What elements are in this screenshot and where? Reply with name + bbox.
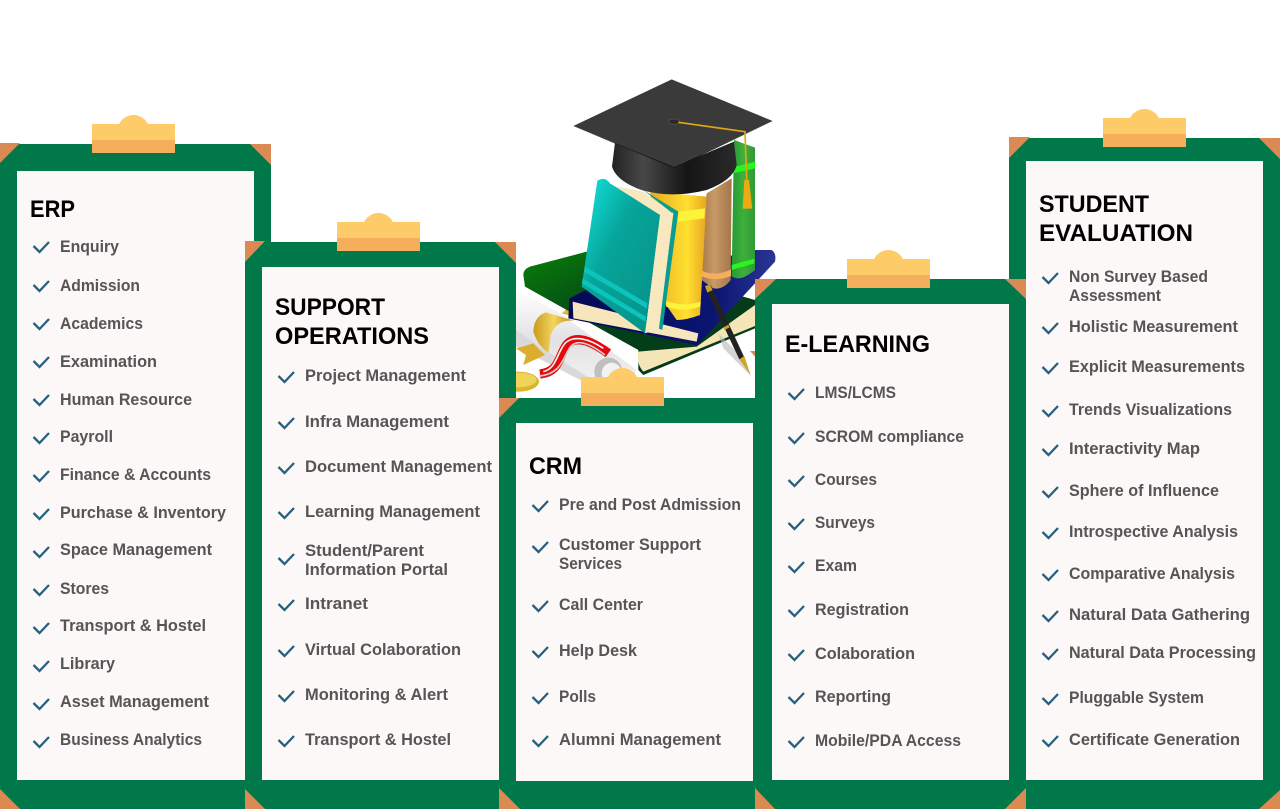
clipboard board bbox=[499, 398, 755, 809]
item: Finance & Accounts: Finance & Accounts bbox=[60, 466, 211, 484]
heading: SUPPORT bbox=[275, 294, 385, 321]
item: Certificate Generation: Certificate Generation bbox=[1069, 731, 1240, 749]
item: Enquiry bbox=[34, 238, 120, 256]
item: Holistic Measurement: Holistic Measurement bbox=[1069, 318, 1238, 336]
small corner fragment bbox=[750, 351, 755, 357]
item: Pre and Post Admission: Pre and Post Admission bbox=[559, 496, 741, 514]
item: Virtual Colaboration: Virtual Colaboration bbox=[305, 641, 461, 659]
item: Alumni Management: Alumni Management bbox=[559, 731, 721, 749]
navy book bbox=[568, 250, 775, 345]
heading bbox=[275, 294, 429, 350]
clip bbox=[1103, 109, 1186, 147]
item: Non Survey Based Assessment: Non Survey Based bbox=[1069, 268, 1208, 286]
panel: Student Evaluation bbox=[1009, 109, 1280, 809]
item: Non Survey Based Assessment bbox=[1042, 268, 1208, 305]
illustration: graduation cap on books bbox=[498, 79, 775, 392]
item: Customer Support Services: Services bbox=[559, 555, 622, 573]
heading bbox=[1039, 191, 1193, 247]
content sheet bbox=[1026, 161, 1263, 780]
corner accents bbox=[755, 279, 1026, 809]
large green book bbox=[523, 252, 755, 375]
item: Natural Data Gathering: Natural Data Gathering bbox=[1069, 606, 1250, 624]
item: Transport & Hostel: Transport & Hostel bbox=[60, 617, 206, 635]
item: Exam: Exam bbox=[815, 557, 857, 575]
item: Human Resource: Human Resource bbox=[60, 391, 192, 409]
item: Library bbox=[34, 655, 116, 673]
item: Infra Management: Infra Management bbox=[305, 413, 450, 431]
item: Student/Parent Information Portal bbox=[278, 542, 448, 579]
item: Intranet: Intranet bbox=[305, 595, 369, 613]
item: Monitoring & Alert: Monitoring & Alert bbox=[305, 686, 448, 704]
content sheet bbox=[772, 304, 1009, 780]
panel: ERP bbox=[0, 115, 271, 809]
heading: CRM bbox=[529, 453, 582, 480]
item: Academics: Academics bbox=[60, 315, 143, 333]
item: Admission: Admission bbox=[60, 277, 140, 295]
item: Sphere of Influence: Sphere of Influence bbox=[1069, 482, 1219, 500]
item: Stores bbox=[34, 580, 109, 598]
item: Trends Visualizations: Trends Visualizations bbox=[1069, 401, 1232, 419]
clip bbox=[847, 250, 930, 288]
heading: ERP bbox=[30, 196, 75, 223]
item: Student/Parent Information Portal: Student/Parent bbox=[305, 542, 424, 560]
item: Intranet bbox=[278, 595, 369, 613]
clip bbox=[337, 213, 420, 251]
corner accents bbox=[0, 143, 271, 809]
clip bbox=[92, 115, 175, 153]
panel: E-Learning bbox=[755, 250, 1026, 809]
mortarboard cap bbox=[573, 79, 773, 209]
upright brown book bbox=[697, 178, 732, 289]
item: Colaboration: Colaboration bbox=[815, 645, 915, 663]
upright green book bbox=[732, 138, 755, 278]
item: Courses: Courses bbox=[815, 471, 877, 489]
item: Asset Management: Asset Management bbox=[60, 693, 209, 711]
item: Polls: Polls bbox=[559, 688, 596, 706]
item: Enquiry: Enquiry bbox=[60, 238, 120, 256]
item: Surveys bbox=[788, 514, 875, 532]
item: Document Management: Document Management bbox=[305, 458, 493, 476]
item: Registration: Registration bbox=[815, 601, 909, 619]
item: Reporting: Reporting bbox=[815, 688, 891, 706]
content sheet bbox=[262, 267, 499, 780]
item: Call Center: Call Center bbox=[559, 596, 644, 614]
item: Customer Support Services bbox=[532, 536, 701, 573]
upright yellow book bbox=[650, 192, 707, 320]
heading: EVALUATION bbox=[1039, 220, 1193, 247]
item: Payroll bbox=[34, 428, 113, 446]
item: Non Survey Based Assessment: Assessment bbox=[1069, 287, 1161, 305]
content sheet bbox=[516, 423, 753, 781]
item: Pluggable System: Pluggable System bbox=[1069, 689, 1204, 707]
item: Comparative Analysis: Comparative Analysis bbox=[1069, 565, 1235, 583]
item: Student/Parent Information Portal: Information Portal bbox=[305, 561, 448, 579]
heading: OPERATIONS bbox=[275, 323, 429, 350]
item: Surveys: Surveys bbox=[815, 514, 875, 532]
diploma scroll bbox=[498, 290, 637, 392]
item: Introspective Analysis: Introspective Analysis bbox=[1069, 523, 1238, 541]
item: Project Management: Project Management bbox=[305, 367, 467, 385]
item: LMS/LCMS: LMS/LCMS bbox=[815, 384, 896, 402]
item: Purchase & Inventory: Purchase & Inventory bbox=[60, 504, 227, 522]
clipboard board bbox=[755, 279, 1026, 809]
panel: Support Operations bbox=[245, 213, 516, 809]
item: Learning Management: Learning Management bbox=[305, 503, 480, 521]
item: Customer Support Services: Customer Support bbox=[559, 536, 701, 554]
item: Explicit Measurements: Explicit Measurements bbox=[1069, 358, 1245, 376]
panel: CRM bbox=[499, 368, 755, 809]
item: Library: Library bbox=[60, 655, 116, 673]
clipboard board bbox=[0, 144, 271, 809]
heading: E-LEARNING bbox=[785, 331, 930, 358]
item: Payroll: Payroll bbox=[60, 428, 113, 446]
item: Space Management: Space Management bbox=[60, 541, 212, 559]
clipboard board bbox=[245, 242, 516, 809]
clipboard board bbox=[1009, 138, 1280, 809]
clip bbox=[581, 368, 664, 406]
content sheet bbox=[17, 171, 254, 780]
item: Transport & Hostel: Transport & Hostel bbox=[305, 731, 451, 749]
item: Exam bbox=[788, 557, 857, 575]
item: Examination: Examination bbox=[60, 353, 157, 371]
item: Help Desk: Help Desk bbox=[559, 642, 638, 660]
heading: STUDENT bbox=[1039, 191, 1149, 218]
item: Stores: Stores bbox=[60, 580, 109, 598]
pen bbox=[705, 285, 751, 375]
corner accents bbox=[1009, 137, 1280, 809]
item: Business Analytics: Business Analytics bbox=[60, 731, 202, 749]
item: Natural Data Processing: Natural Data Processing bbox=[1069, 644, 1256, 662]
corner accents bbox=[245, 241, 516, 809]
item: Polls bbox=[532, 688, 596, 706]
corner accents bbox=[499, 398, 520, 809]
teal book bbox=[582, 179, 678, 333]
item: Mobile/PDA Access: Mobile/PDA Access bbox=[815, 732, 961, 750]
item: SCROM compliance: SCROM compliance bbox=[815, 428, 964, 446]
item: Courses bbox=[788, 471, 877, 489]
item: Interactivity Map: Interactivity Map bbox=[1069, 440, 1200, 458]
